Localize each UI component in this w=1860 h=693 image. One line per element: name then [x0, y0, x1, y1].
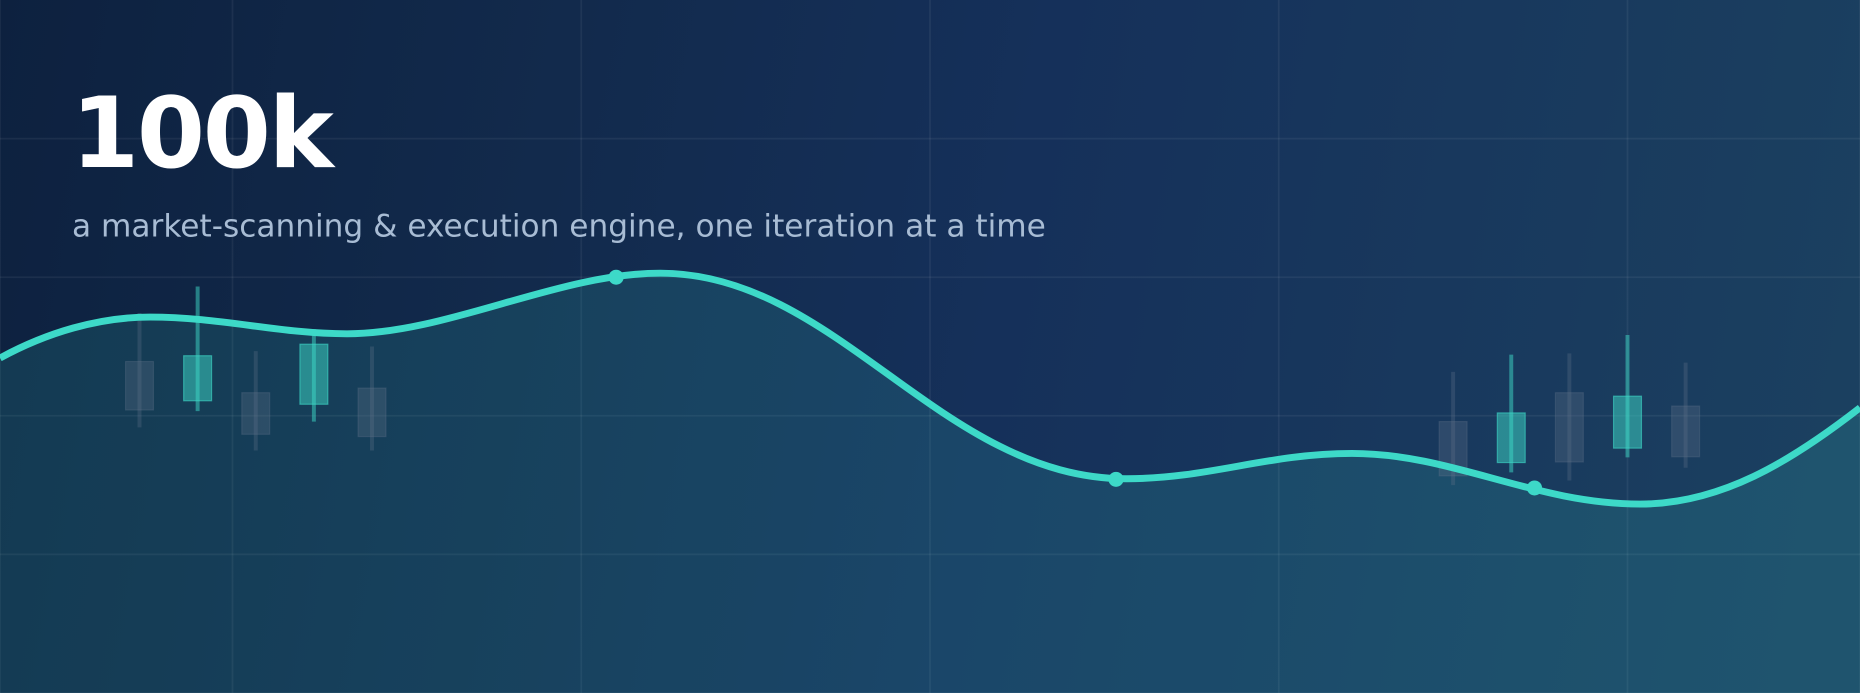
- area under curve: [0, 273, 1860, 693]
- right candlesticks: [1439, 335, 1700, 485]
- text block: [71, 77, 1046, 244]
- title: 100k: [71, 77, 337, 191]
- subtitle: a market-scanning & execution engine, one iteration at a time: [72, 208, 1046, 244]
- data points: [609, 270, 1542, 495]
- trend line: [0, 273, 1860, 504]
- left candlesticks: [126, 286, 386, 450]
